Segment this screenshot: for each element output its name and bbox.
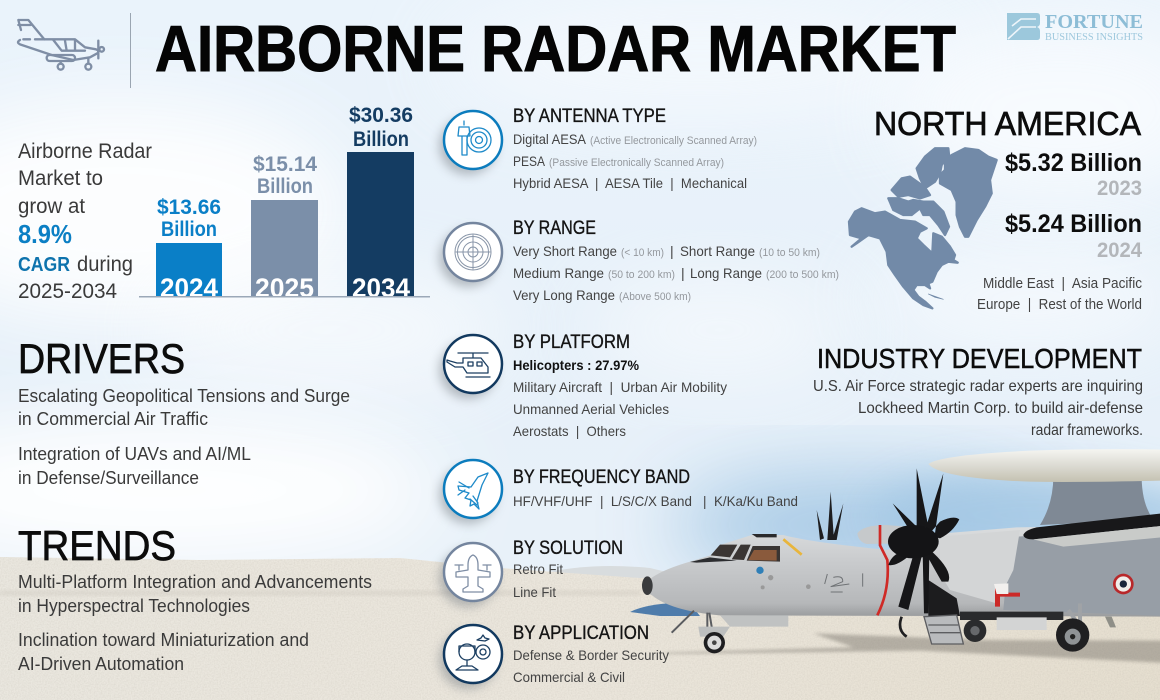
segment: by antenna type: (Passive Electronically Scanned Array) [549,157,724,169]
panel: North America: $5.24 Billion [1005,210,1142,238]
icon badge: pilot and target [439,625,502,689]
nose gear [672,611,730,653]
nose cone [642,576,653,595]
wing [1023,511,1160,539]
bar: 2025: 2025 [255,273,314,303]
panel: trends: Inclination toward Miniaturization and [18,630,309,650]
segment: by antenna type [439,106,757,191]
map: North America [849,148,997,308]
segment: by range: (Above 500 km) [619,291,691,303]
bar: 2025: Billion [257,175,313,198]
panel: North America [849,105,1142,313]
segment: by application [439,623,669,689]
rear propeller [817,492,843,540]
segment: by range: (200 to 500 km) [766,269,839,281]
panel: trends: Multi-Platform Integration and Advancements [18,572,372,592]
text block: CAGR statement: 8.9% [18,219,72,249]
segment: by frequency band: HF/VHF/UHF | L/S/C/X Band | K/Ka/Ku Band [513,493,798,509]
bar: 2024: Billion [161,218,217,241]
panel: North America: Middle East | Asia Pacific [983,275,1142,292]
panel: industry development: radar frameworks. [1031,422,1143,439]
segment: by antenna type: PESA [513,153,546,169]
segment: by antenna type: Hybrid AESA | AESA Tile | Mechanical [513,175,747,191]
panel: drivers: Escalating Geopolitical Tensions and Surge [18,386,350,406]
segment: by range: | [670,243,674,259]
text block: CAGR statement: grow at [18,195,85,218]
segment: by platform: Helicopters : 27.97% [513,357,640,373]
segment: by solution [439,538,623,607]
segment: by frequency band: BY FREQUENCY BAND [513,467,690,488]
panel: industry development: U.S. Air Force strategic radar experts are inquiring [813,378,1143,395]
segment: by application: BY APPLICATION [513,623,649,644]
segment: by platform: Aerostats | Others [513,423,626,439]
panel: industry development: Lockheed Martin Corp. to build air-defense [858,400,1143,417]
radome [928,449,1160,482]
segment: by range: (< 10 km) [621,247,664,259]
heading: trends: TRENDS [18,522,176,569]
spinner [888,525,939,558]
bar: 2024: $13.66 [157,196,221,219]
text block: CAGR statement: 2025-2034 [18,280,117,303]
segment: by application: Defense & Border Security [513,647,669,663]
bar: 2025: $15.14 [253,153,317,176]
bar: 2025 [251,153,318,303]
text block: CAGR statement: CAGR [18,254,70,276]
segment: by antenna type: (Active Electronically Scanned Array) [590,135,757,147]
segment: by range: Long Range [690,265,762,281]
panel: trends: AI-Driven Automation [18,654,184,674]
segment: by platform: BY PLATFORM [513,332,630,353]
panel: drivers [18,335,350,488]
rear engine [857,525,907,544]
text block: CAGR statement: during [77,253,133,276]
yellow stripe [783,539,802,555]
bar: 2024 [156,196,222,303]
icon: small aircraft [18,20,104,70]
segment: by solution: Line Fit [513,584,556,600]
heading: drivers: DRIVERS [18,335,185,382]
segment: by platform [439,332,727,439]
segment: by solution: Retro Fit [513,561,563,577]
main gear [900,603,1089,652]
heading: North America: NORTH AMERICA [874,105,1141,142]
bar: 2034: 2034 [352,273,410,303]
segment: by range: Short Range [680,243,755,259]
segment: by solution: BY SOLUTION [513,538,623,559]
logo: Fortune Business Insights: FORTUNE [1045,11,1143,33]
rear body behind wing [1003,527,1160,617]
panel: North America: 2024 [1097,239,1142,262]
segment: by range: | [681,265,685,281]
panel: North America: 2023 [1097,177,1142,200]
segment: by application: Commercial & Civil [513,669,625,685]
icon badge: helicopter [439,335,502,399]
background aircraft [630,603,700,616]
segment: by range: (10 to 50 km) [759,247,820,259]
segment: by range: Very Short Range [513,243,617,259]
fuselage [643,525,1160,617]
bar: 2034: Billion [353,128,409,151]
segment: by platform: Unmanned Aerial Vehicles [513,401,669,417]
panel: trends [18,522,372,674]
panel: North America: $5.32 Billion [1005,149,1142,177]
radome pylon [1040,481,1150,525]
header divider [130,13,131,88]
ground shadow [663,633,1160,664]
segment: by range [439,218,839,303]
engine red mark [995,588,1020,607]
bar chart: market size [139,104,430,303]
segment: by range: (50 to 200 km) [608,269,675,281]
icon badge: transport aircraft [439,543,502,607]
segment: by range: BY RANGE [513,218,596,239]
segment: by range: Medium Range [513,265,604,281]
segment: by range: Very Long Range [513,287,615,303]
bar: 2024: 2024 [160,273,218,303]
door and air stair [928,580,960,616]
icon badge: radar tower [439,111,502,175]
segment: by platform: Military Aircraft | Urban Air Mobility [513,379,727,395]
panel: industry development [813,343,1143,439]
fuselage marks [825,573,863,592]
segment: by antenna type: Digital AESA [513,131,587,147]
segment: by antenna type: BY ANTENNA TYPE [513,106,666,127]
panel: drivers: in Defense/Surveillance [18,468,199,488]
panel: drivers: in Commercial Air Traffic [18,409,208,429]
aircraft photo illustration [642,449,1160,664]
text block: CAGR statement: Airborne Radar [18,140,152,163]
belly [720,615,788,627]
icon badge: radar scope [439,223,502,287]
roundel [1113,574,1134,594]
panel: drivers: Integration of UAVs and AI/ML [18,444,251,464]
bar: 2034 [347,104,414,303]
segment: by frequency band [439,460,798,524]
propeller blades [888,468,959,613]
title: AIRBORNE RADAR MARKET [155,12,956,85]
engine nacelle [940,536,1019,603]
text block: CAGR statement: Market to [18,167,103,190]
panel: trends: in Hyperspectral Technologies [18,596,250,616]
logo: Fortune Business Insights: BUSINESS INSIGHTS [1045,32,1143,43]
bar: 2034: $30.36 [349,104,413,127]
logo: Fortune Business Insights [1007,11,1143,43]
icon badge: fighter jet [439,460,502,524]
red bands [877,525,888,615]
cockpit windows [711,545,780,562]
text block: CAGR statement [18,140,152,303]
panel: North America: Europe | Rest of the World [977,296,1142,313]
